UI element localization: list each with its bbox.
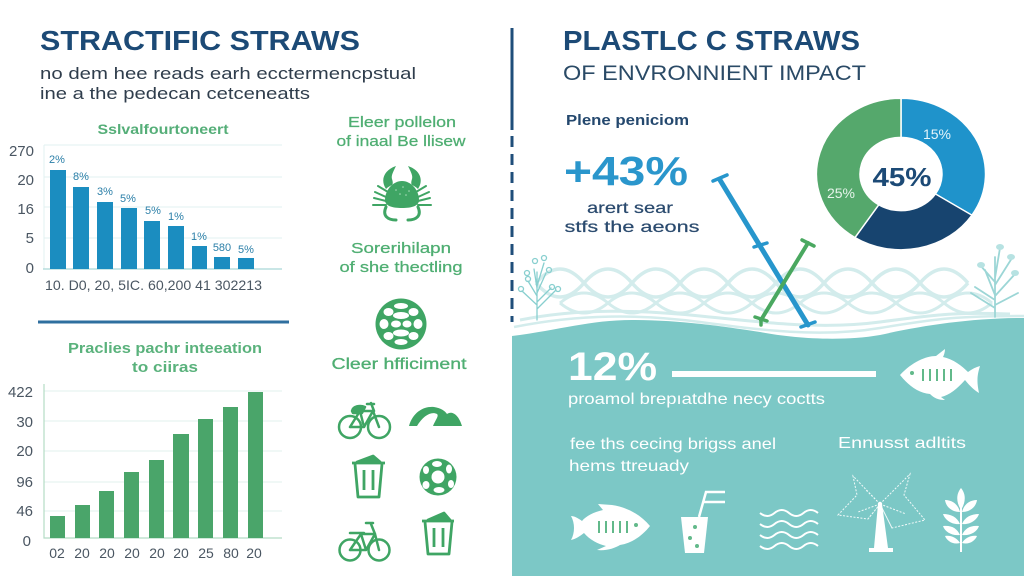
green chart y axis labels: 96 [16,474,33,491]
icon: right seaweed tree [971,244,1019,317]
subtitle text block [40,64,416,103]
green bars [50,392,263,538]
blue chart y axis labels: 16 [17,201,34,218]
panel: blue bar chart [9,121,282,293]
blue bar value labels: 8% [73,171,89,183]
icon: cup with straw [681,492,725,553]
icon: football [420,458,456,496]
heading: eleer pollelon [336,114,466,150]
subtitle text block: ine a the pedecan cetceneatts [40,84,310,103]
green chart x axis labels: 20 [99,545,115,561]
green chart x axis labels: 80 [223,545,239,561]
icon: net globe [376,298,426,350]
stat caption: proamol brepıatdhe necy coctts [568,391,825,408]
blue bar value labels: 1% [168,211,184,223]
title: stractific straws: STRACTIFIC STRAWS [40,25,360,56]
stat description: arert sear [587,200,674,217]
icon: water waves [760,510,818,549]
green chart y axis labels: 30 [16,414,33,431]
blue bar value labels: 5% [238,244,254,256]
text block: fee ths cecing: hems ttreuady [569,458,689,475]
stat number: +43% [564,148,688,194]
panel: green bar chart [8,340,282,561]
heading: sorerihilapn: Sorerihilapn [351,240,451,257]
icon: fish facing left [900,349,980,400]
panel: centre icon column [332,114,467,560]
green chart x axis labels: 20 [124,545,140,561]
subtitle: environment impact: OF ENVRONNIENT IMPACT [563,62,866,85]
green chart x axis labels [49,545,262,561]
central divider [510,28,514,322]
icon: blue straw [713,175,815,327]
donut label 25 percent: 25% [827,185,855,201]
donut label 15 percent: 15% [923,126,951,142]
green chart y axis labels: 20 [16,443,33,460]
blue bar value labels: 5% [120,193,136,205]
green chart y axis labels: 46 [16,503,33,520]
blue bar value labels: 2% [49,154,65,166]
heading: eleer pollelon: of inaal Be llisew [336,133,466,150]
green chart heading [68,340,262,376]
green chart x axis labels: 20 [74,545,90,561]
icon: wind turbine butterfly [838,474,925,552]
blue bar value labels: 1% [191,231,207,243]
blue chart y axis labels [9,143,34,277]
stat: 12 percent [568,345,876,408]
text block: fee ths cecing [569,436,776,475]
donut segment: navy [855,194,972,250]
panel: teal lower section [512,318,1024,576]
donut segment: blue [901,98,986,215]
blue chart y axis labels: 5 [26,230,34,247]
donut chart [816,98,986,250]
green chart x axis labels: 02 [49,545,65,561]
blue chart y axis labels: 0 [26,260,34,277]
blue chart heading: Sslvalfourtoneert [98,121,229,137]
stat: plus 43 percent [564,113,700,236]
green chart y axis labels: 422 [8,384,33,401]
green chart heading: to ciiras [132,359,198,376]
green chart x axis labels: 20 [149,545,165,561]
12 percent value: 12% [568,345,657,389]
blue bar value labels: 580 [213,242,231,254]
green chart y axis labels [8,384,33,550]
donut segment: green [816,98,901,238]
blue chart y axis labels: 20 [17,172,34,189]
blue bar value labels [49,154,254,256]
icon: wheat sprig [943,488,979,552]
icon: fish facing right [571,504,650,550]
green chart x axis labels: 25 [198,545,214,561]
icon: trash can two [422,513,454,554]
heading: eleer pollelon: Eleer pollelon [348,114,456,131]
white rule [672,371,876,377]
text block: ennusst adltits: Ennusst adltits [838,435,966,452]
heading: sorerihilapn: of she thectling [340,259,462,276]
heading: cleer hfficiment: Cleer hfficiment [332,356,467,373]
icon: crab [373,166,431,220]
subtitle text block: no dem hee reads earh ecctermencpstual [40,64,416,83]
icon: bicycle two [340,523,390,560]
blue bar value labels: 5% [145,205,161,217]
icon: bicycle one [339,403,390,438]
blue chart y axis labels: 270 [9,143,34,160]
icon: trash can one [352,456,385,497]
wave net [514,269,1024,333]
icon: green straw [755,240,814,325]
icon: arch and hill [409,407,462,426]
blue bars [50,170,254,269]
stat description [564,200,700,236]
text block: fee ths cecing: fee ths cecing brigss anel [570,436,776,453]
panel: right heading [563,25,866,85]
title: plastlc straws: PLASTLC C STRAWS [563,25,860,56]
blue chart x axis labels: 10. D0, 20, 5IC. 60,200 41 302213 [45,277,262,293]
green chart x axis labels: 20 [246,545,262,561]
green chart heading: Praclies pachr inteeation [68,340,262,357]
panel: left column heading [40,25,416,103]
heading: sorerihilapn [340,240,462,276]
stat description: stfs the aeons [564,219,700,236]
green chart y axis labels: 0 [23,533,31,550]
icon: left seaweed tree [518,256,560,320]
stat label: Plene peniciom [566,113,689,129]
blue bar value labels: 3% [97,186,113,198]
green chart x axis labels: 20 [173,545,189,561]
donut centre value: 45% [872,162,932,192]
